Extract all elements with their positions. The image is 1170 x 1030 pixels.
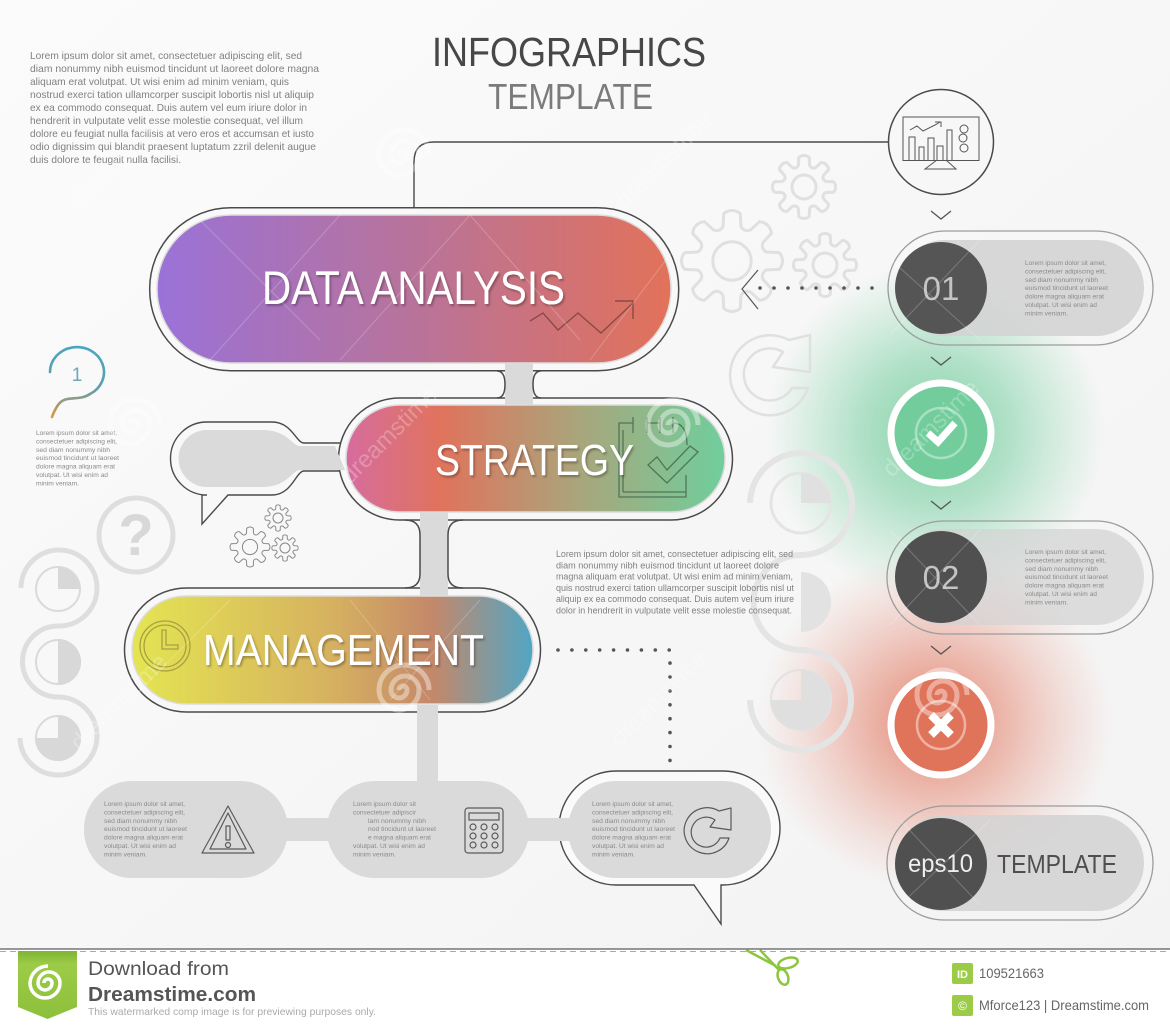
text block: left small <box>36 430 119 487</box>
text block: left small: minim veniam. <box>36 480 79 487</box>
text block: top left: diam nonummy nibh euismod tincidunt ut laoreet dolore magna <box>30 64 319 75</box>
pie column: left <box>20 550 97 775</box>
text: Lorem ipsum dolor sit amet, <box>1025 260 1106 267</box>
text <box>1025 260 1108 317</box>
text: Lorem ipsum dolor sit <box>353 801 416 808</box>
watermark overlay <box>65 106 990 905</box>
small gears <box>230 505 298 567</box>
icon: question mark: ? <box>118 503 154 568</box>
dotted line: management to bubble <box>558 650 670 764</box>
footer id <box>952 963 1044 984</box>
text block: top left: duis dolore te feugait nulla facilisi. <box>30 155 181 166</box>
text block: top left: odio dignissim qui blandit praesent luptatum zzril delenit augue <box>30 142 316 153</box>
text <box>1025 549 1108 606</box>
panel: step 01 <box>888 231 1153 345</box>
icon: trend arrow <box>530 301 633 333</box>
footer text: Dreamstime.com <box>88 984 256 1006</box>
panel: eps10 template: eps10 <box>908 850 973 878</box>
footer background <box>0 949 1170 1030</box>
text: dolore magna aliquam erat <box>104 835 183 842</box>
text block: center: Lorem ipsum dolor sit amet, consectetuer adipiscing elit, sed <box>556 549 793 559</box>
pill: management <box>132 596 533 704</box>
heading: strategy: STRATEGY <box>435 436 634 485</box>
icon: clock <box>140 621 190 671</box>
text block: top left: ex ea commodo consequat. Duis autem vel eum iriure dolor in <box>30 103 307 114</box>
text: volutpat. Ut wisi enim ad <box>1025 302 1097 309</box>
footer id: 109521663 <box>979 966 1044 981</box>
footer text <box>88 959 376 1018</box>
panel: management outline <box>124 588 540 712</box>
text block: center: dolor in hendrerit in vulputate velit esse molestie consequat. <box>556 606 792 616</box>
footer text: Download from <box>88 959 229 980</box>
watermark overlay: dreamstime <box>877 374 985 482</box>
icon: question mark <box>99 498 173 572</box>
watermark overlay: dreamstime <box>605 644 713 752</box>
heading: management: MANAGEMENT <box>203 626 484 675</box>
text block: center: diam nonummy nibh euismod tincidunt ut laoreet dolore <box>556 560 779 570</box>
title: INFOGRAPHICS <box>432 29 706 75</box>
text block: left small: consectetuer adipiscing elit, <box>36 438 117 445</box>
panel: eps10 template <box>887 806 1153 920</box>
text: Lorem ipsum dolor sit amet, <box>592 801 673 808</box>
pill: strategy <box>346 405 725 512</box>
text: consectetuer adipiscing elit, <box>1025 268 1106 275</box>
footer credit: © <box>958 999 967 1013</box>
heading: data analysis: DATA ANALYSIS <box>262 261 565 314</box>
text block: left small: Lorem ipsum dolor sit amet, <box>36 430 117 437</box>
text: lam nonummy nibh <box>368 818 426 825</box>
text: minim veniam. <box>353 851 396 858</box>
text: minim veniam. <box>1025 599 1068 606</box>
text: sed diam nonummy nibh <box>1025 277 1098 284</box>
text: euismod tincidunt ut laoreet <box>592 826 675 833</box>
footer logo badge <box>18 951 77 1019</box>
text: euismod tincidunt ut laoreet <box>104 826 187 833</box>
text block: top left: Lorem ipsum dolor sit amet, consectetuer adipiscing elit, sed <box>30 51 302 62</box>
panel: eps10 template: TEMPLATE <box>997 849 1117 879</box>
text <box>353 801 436 858</box>
footer credit: Mforce123 | Dreamstime.com <box>979 997 1149 1013</box>
text: nod tincidunt ut laoreet <box>368 826 436 833</box>
text: volutpat. Ut wisi enim ad <box>353 843 425 850</box>
text: sed diam nonummy nibh <box>592 818 665 825</box>
text: volutpat. Ut wisi enim ad <box>592 843 664 850</box>
text: dolore magna aliquam erat <box>1025 583 1104 590</box>
bottom row connectors <box>285 818 575 841</box>
footer credit <box>952 995 1149 1016</box>
icon: monitor circle <box>888 90 994 194</box>
text: minim veniam. <box>592 851 635 858</box>
text block: top left <box>30 51 319 166</box>
panel: step 02: 02 <box>923 559 959 596</box>
text: euismod tincidunt ut laoreet <box>1025 574 1108 581</box>
text block: center <box>556 549 795 616</box>
panel: data analysis outline <box>150 208 679 371</box>
watermark overlay: dreamstime <box>335 381 443 489</box>
watermark overlay: dreamstime <box>67 106 175 214</box>
text: consectetuer adipiscir <box>353 809 417 816</box>
text: consectetuer adipiscing elit, <box>104 809 185 816</box>
panel: bottom step 2 <box>327 781 529 878</box>
connector: data to strategy <box>497 360 541 408</box>
green glow <box>765 262 1105 602</box>
speech bubble: gray <box>170 422 345 524</box>
text: sed diam nonummy nibh <box>104 818 177 825</box>
text: Lorem ipsum dolor sit amet, <box>1025 549 1106 556</box>
icon: refresh large <box>730 335 810 415</box>
text: Lorem ipsum dolor sit amet, <box>104 801 185 808</box>
text block: left small: sed diam nonummy nibh <box>36 447 110 454</box>
icon: green check circle <box>891 383 991 483</box>
text: sed diam nonummy nibh <box>1025 566 1098 573</box>
text: e magna aliquam erat <box>368 835 431 842</box>
text block: top left: nostrud exerci tation ullamcorper suscipit lobortis nisl ut aliquip <box>30 90 314 101</box>
icon: calendar <box>619 417 698 497</box>
connector: strategy to management <box>405 510 463 600</box>
icon: calculator <box>465 808 503 853</box>
pill: data analysis <box>157 215 671 363</box>
icon: scissors <box>746 950 799 986</box>
icon: warning <box>202 806 254 853</box>
icon: number 1: 1 <box>72 365 82 386</box>
icon: red cross circle <box>891 675 991 775</box>
text: dolore magna aliquam erat <box>592 835 671 842</box>
text block: left small: volutpat. Ut wisi enim ad <box>36 472 108 479</box>
text block: center: aliquip ex ea commodo consequat. Duis autem vel eum iriure <box>556 594 794 604</box>
text block: center: magna aliquam erat volutpat. Ut wisi enim ad minim veniam, <box>556 572 793 582</box>
text block: top left: hendrerit in vulputate velit esse molestie consequat, vel illum <box>30 116 303 127</box>
icon: gears top right <box>682 155 857 311</box>
text: volutpat. Ut wisi enim ad <box>1025 591 1097 598</box>
panel: step 02 <box>887 521 1153 634</box>
text: volutpat. Ut wisi enim ad <box>104 843 176 850</box>
text: minim veniam. <box>104 851 147 858</box>
text: minim veniam. <box>1025 310 1068 317</box>
subtitle: TEMPLATE <box>488 76 653 117</box>
text block: top left: dolore eu feugiat nulla facilisis at vero eros et accumsan et iusto <box>30 129 314 140</box>
footer cut line <box>0 948 1170 952</box>
connector: management to bottom row <box>417 705 438 785</box>
text: dolore magna aliquam erat <box>1025 294 1104 301</box>
dotted arrow: step 01 to gears <box>742 270 876 309</box>
text <box>592 801 675 858</box>
chevrons <box>931 211 951 654</box>
text block: left small: dolore magna aliquam erat <box>36 464 115 471</box>
text block: top left: aliquam erat volutpat. Ut wisi enim ad minim veniam, quis <box>30 77 289 88</box>
panel: bottom step 3 speech bubble <box>540 771 780 924</box>
text: euismod tincidunt ut laoreet <box>1025 285 1108 292</box>
text block: left small: euismod tincidunt ut laoreet <box>36 455 119 462</box>
icon: number 1 <box>50 347 104 417</box>
title <box>432 29 706 117</box>
panel: strategy outline <box>338 398 732 520</box>
footer id: ID <box>957 969 968 981</box>
red glow <box>757 552 1113 892</box>
watermark overlay: dreamstime <box>610 106 718 214</box>
text <box>104 801 187 858</box>
watermark overlay: dreamstime <box>65 648 173 756</box>
text: consectetuer adipiscing elit, <box>592 809 673 816</box>
panel: bottom step 1 <box>84 781 288 878</box>
panel: step 01: 01 <box>923 270 959 307</box>
icon: refresh <box>684 808 731 854</box>
connector line: monitor to data analysis <box>414 142 888 207</box>
text: consectetuer adipiscing elit, <box>1025 557 1106 564</box>
pie column: right <box>750 453 852 750</box>
footer text: This watermarked comp image is for previewing purposes only. <box>88 1006 376 1018</box>
text block: center: quis nostrud exerci tation ullamcorper suscipit lobortis nisl ut <box>556 583 795 593</box>
